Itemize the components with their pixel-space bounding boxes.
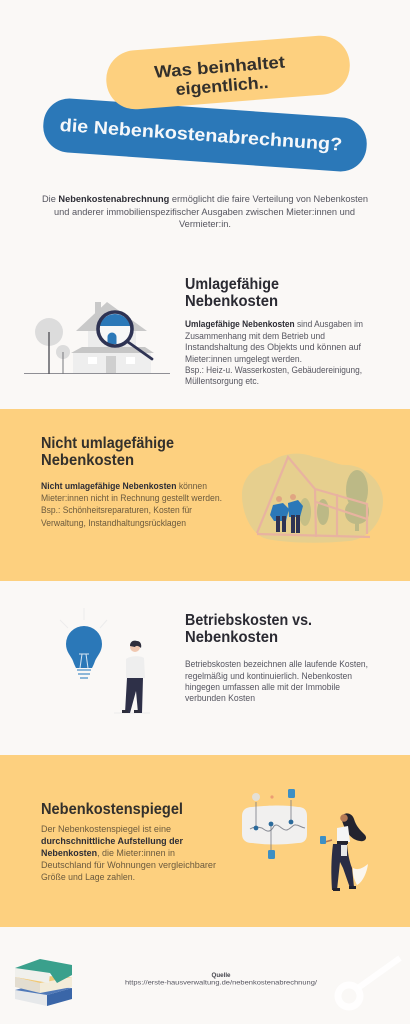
icon: faint white key [338,958,400,1007]
body text [41,481,222,528]
title pill: blue [42,97,368,173]
body text: Zusammenhang mit dem Betrieb und [185,331,325,341]
icon: stack of books [15,959,72,1006]
title pill: yellow: eigentlich.. [175,73,269,99]
title pill: yellow: Was beinhaltet [154,53,286,82]
body text: Mieter:innen nicht in Rechnung gestellt werden. [41,493,222,503]
heading: Nebenkosten [185,629,278,646]
panel: Betriebskosten vs. Nebenkosten [60,608,368,713]
heading [185,276,279,310]
body text: regelmäßig und kontinuierlich. Nebenkosten [185,671,352,681]
body text: Instandshaltung des Objekts und können auf [185,342,361,352]
body text: Müllentsorgung etc. [185,376,259,386]
source note: Quelle [212,972,231,979]
body text: Nebenkosten, die Mieter:innen in [41,848,175,858]
body text: Bsp.: Schönheitsreparaturen, Kosten für [41,505,192,515]
heading [185,612,312,646]
body text: Der Nebenkostenspiegel ist eine [41,824,171,834]
body text: Mieter:innen umgelegt werden. [185,354,302,364]
panel: Nebenkostenspiegel [0,755,410,927]
source note [125,972,317,986]
body text: Bsp.: Heiz-u. Wasserkosten, Gebäudereinigung, [185,365,362,375]
intro text: Vermieter:in. [179,219,231,229]
heading: Nebenkosten [41,452,134,469]
heading: Nebenkostenspiegel [41,801,183,818]
intro text [42,194,368,229]
body text [41,824,216,882]
body text [185,319,363,386]
heading: Umlagefähige [185,276,279,293]
body text: Betriebskosten bezeichnen alle laufende Kosten, [185,659,368,669]
heading [41,435,174,469]
icon: house with magnifier [24,302,170,374]
body text [185,659,368,703]
body text: Nicht umlagefähige Nebenkosten können [41,481,207,491]
illustration: house frame with people [242,454,383,543]
panel: nicht umlagefähige Nebenkosten [0,409,410,581]
panel: umlagefähige Nebenkosten [24,276,363,386]
heading: Nebenkosten [185,293,278,310]
source note: https://erste-hausverwaltung.de/nebenkostenabrechnung/ [125,980,317,986]
title [42,34,368,173]
body text: verbunden Kosten [185,693,255,703]
body text: Umlagefähige Nebenkosten sind Ausgaben im [185,319,363,329]
illustration: light bulb and person [60,608,150,713]
illustration: chart panel and woman [242,789,368,891]
title pill: blue: die Nebenkostenabrechnung? [59,115,343,155]
heading: Nicht umlagefähige [41,435,174,452]
intro text: Die Nebenkostenabrechnung ermöglicht die faire Verteilung von Nebenkosten [42,194,368,204]
body text: Verwaltung, Instandhaltungsrücklagen [41,518,186,528]
intro text: und anderer immobilienspezifischer Ausgaben zwischen Mieter:innen und [54,207,355,217]
heading: Betriebskosten vs. [185,612,312,629]
body text: Größe und Lage zahlen. [41,872,135,882]
title pill: yellow [104,34,352,111]
body text: hingegen umfassen alle mit der Immobile [185,682,340,692]
body text: durchschnittliche Aufstellung der [41,836,183,846]
body text: Deutschland für Wohnungen vergleichbarer [41,860,216,870]
